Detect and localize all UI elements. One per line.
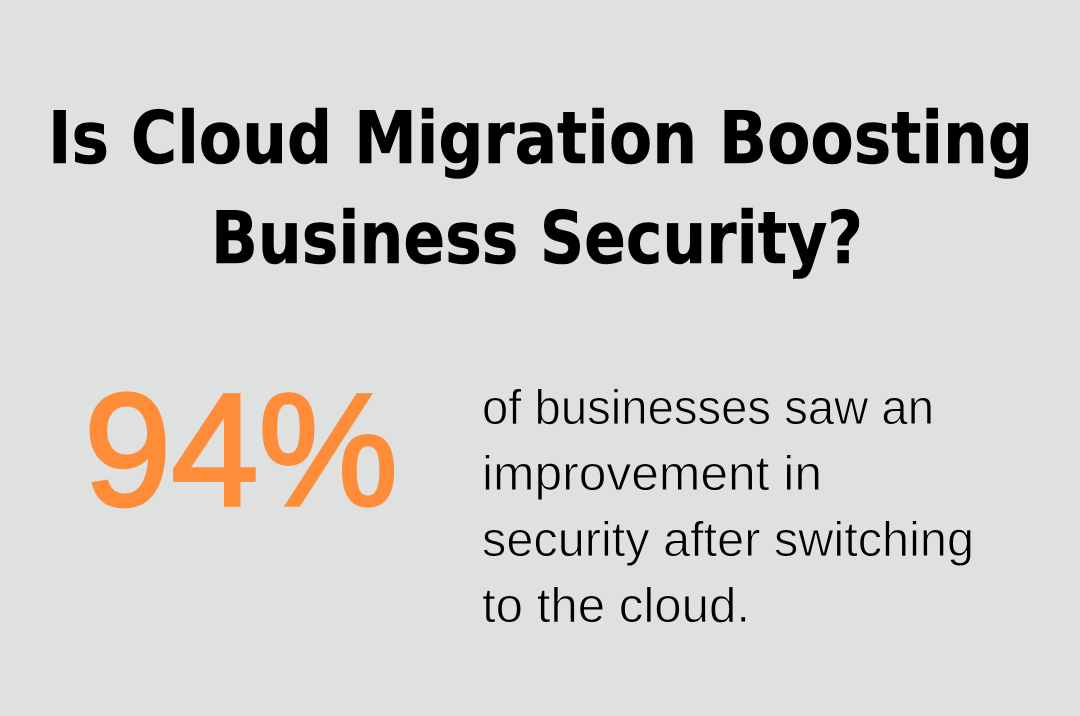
description text: improvement in (482, 447, 822, 501)
description text (482, 381, 974, 633)
description text: of businesses saw an (482, 381, 934, 435)
title: Business Security? (211, 196, 863, 280)
description text: to the cloud. (482, 579, 750, 633)
description text: security after switching (482, 513, 974, 567)
statistic: 94%: 94% (84, 360, 398, 539)
title (48, 96, 1033, 280)
